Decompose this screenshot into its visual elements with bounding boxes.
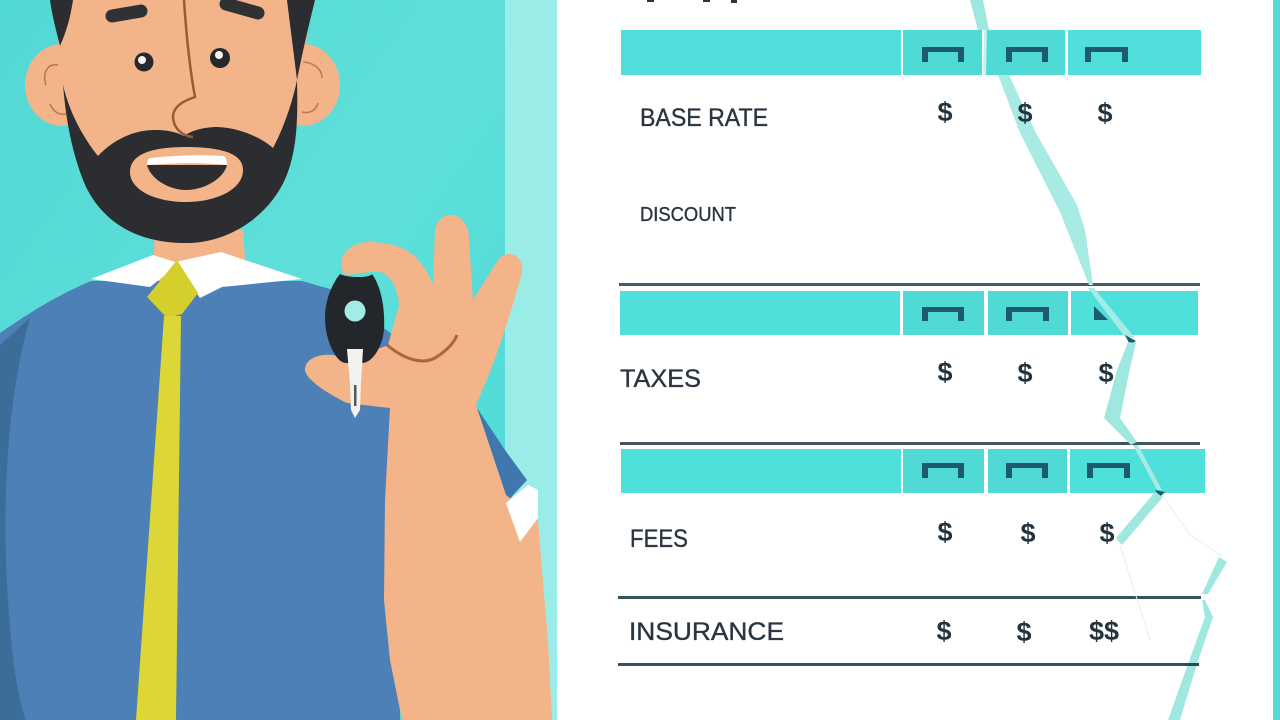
- row: fees: [630, 517, 1115, 553]
- hair left: [50, 0, 73, 46]
- man illustration: [0, 0, 552, 720]
- row: base rate: [640, 97, 1113, 132]
- row: insurance: $: [936, 616, 952, 646]
- row: taxes: [620, 357, 1114, 393]
- eyes: [134, 48, 230, 72]
- row: insurance: $$: [1089, 616, 1119, 646]
- light teal band: [505, 0, 558, 720]
- cropped row at top: [647, 0, 737, 3]
- rule 2: [620, 442, 1200, 445]
- torn paper crack line: [970, 0, 1227, 720]
- rule 4: [618, 663, 1199, 666]
- header row 3: [621, 449, 1205, 493]
- row: taxes: $: [1098, 358, 1114, 388]
- sleeve: [475, 405, 527, 503]
- shirt cuff: [506, 485, 538, 542]
- row: fees: $: [937, 517, 953, 547]
- eyebrows: [112, 4, 258, 16]
- row: fees: FEES: [630, 525, 688, 553]
- palm crease: [387, 335, 457, 361]
- necktie: [136, 260, 198, 720]
- background panel: [0, 0, 506, 720]
- cost table: [618, 30, 1205, 666]
- row: base rate: $: [937, 97, 953, 127]
- row: fees: $: [1020, 518, 1036, 548]
- key button: [344, 300, 366, 322]
- row: base rate: BASE RATE: [640, 104, 768, 132]
- face: [55, 0, 312, 170]
- right edge strip: [1273, 0, 1280, 720]
- car key fob: [325, 274, 384, 418]
- key blade: [347, 349, 363, 418]
- row: discount label: DISCOUNT: [640, 204, 736, 226]
- row: fees: $: [1099, 518, 1115, 548]
- nose: [173, 0, 195, 137]
- hair right: [287, 0, 315, 80]
- row: insurance: [629, 616, 1119, 647]
- collar: [91, 252, 302, 298]
- right ear: [266, 44, 340, 126]
- white document panel: [557, 0, 1273, 720]
- shirt shadow: [0, 318, 30, 720]
- row: taxes: TAXES: [620, 365, 701, 393]
- row: insurance: INSURANCE: [629, 618, 784, 646]
- beard: [63, 80, 297, 243]
- header row 2: [620, 291, 1198, 335]
- rule 1: [619, 283, 1200, 286]
- row: base rate: $: [1097, 98, 1113, 128]
- left ear: [25, 44, 99, 126]
- neck: [152, 230, 247, 285]
- rule 3: [618, 596, 1201, 599]
- row: taxes: $: [937, 357, 953, 387]
- arm and hand: [305, 215, 552, 720]
- row: insurance: $: [1016, 617, 1032, 647]
- mouth: [130, 147, 243, 202]
- base rate middle dollar over crack: $: [1017, 98, 1033, 128]
- row: taxes: $: [1017, 358, 1033, 388]
- shirt torso: [0, 281, 400, 720]
- header row 1: [621, 30, 1201, 75]
